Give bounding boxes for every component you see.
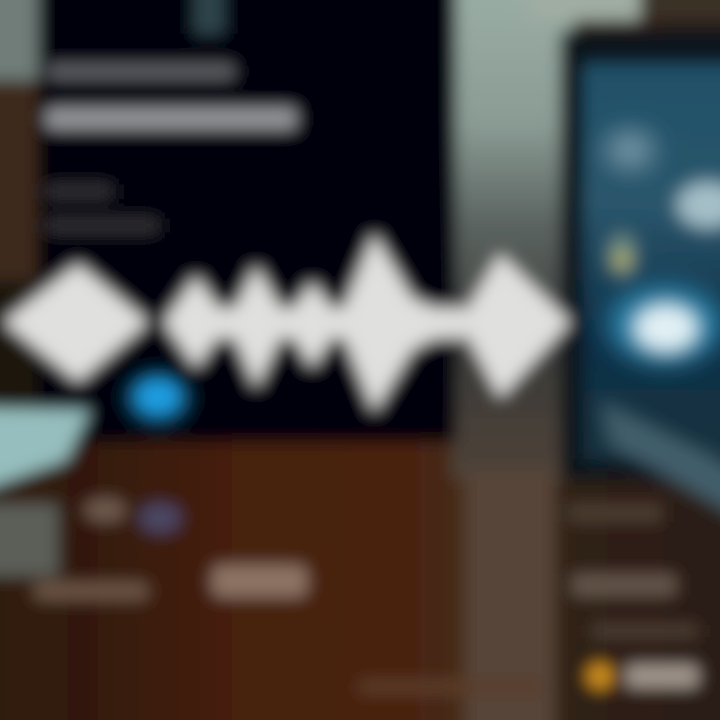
bottom-left labels (illegible) xyxy=(34,498,181,600)
logo: orange mark and wordmark xyxy=(587,663,698,689)
black panel xyxy=(38,0,456,442)
bottom-center faint caption (illegible) xyxy=(358,680,542,694)
pale blue object at left xyxy=(0,408,90,576)
bottom-center label (illegible) xyxy=(212,565,307,597)
bottom-right labels (illegible) xyxy=(568,504,698,638)
device: dark frame with blue screen xyxy=(560,30,720,525)
title text block (illegible) xyxy=(46,64,296,129)
decorative glint at top of panel xyxy=(194,0,224,34)
icon: blue glow xyxy=(124,370,192,426)
background: pale wall and vertical strip xyxy=(452,0,720,720)
subtitle text block (illegible) xyxy=(46,184,158,233)
left edge: wall and brown object xyxy=(0,0,40,410)
audio waveform xyxy=(4,234,570,412)
